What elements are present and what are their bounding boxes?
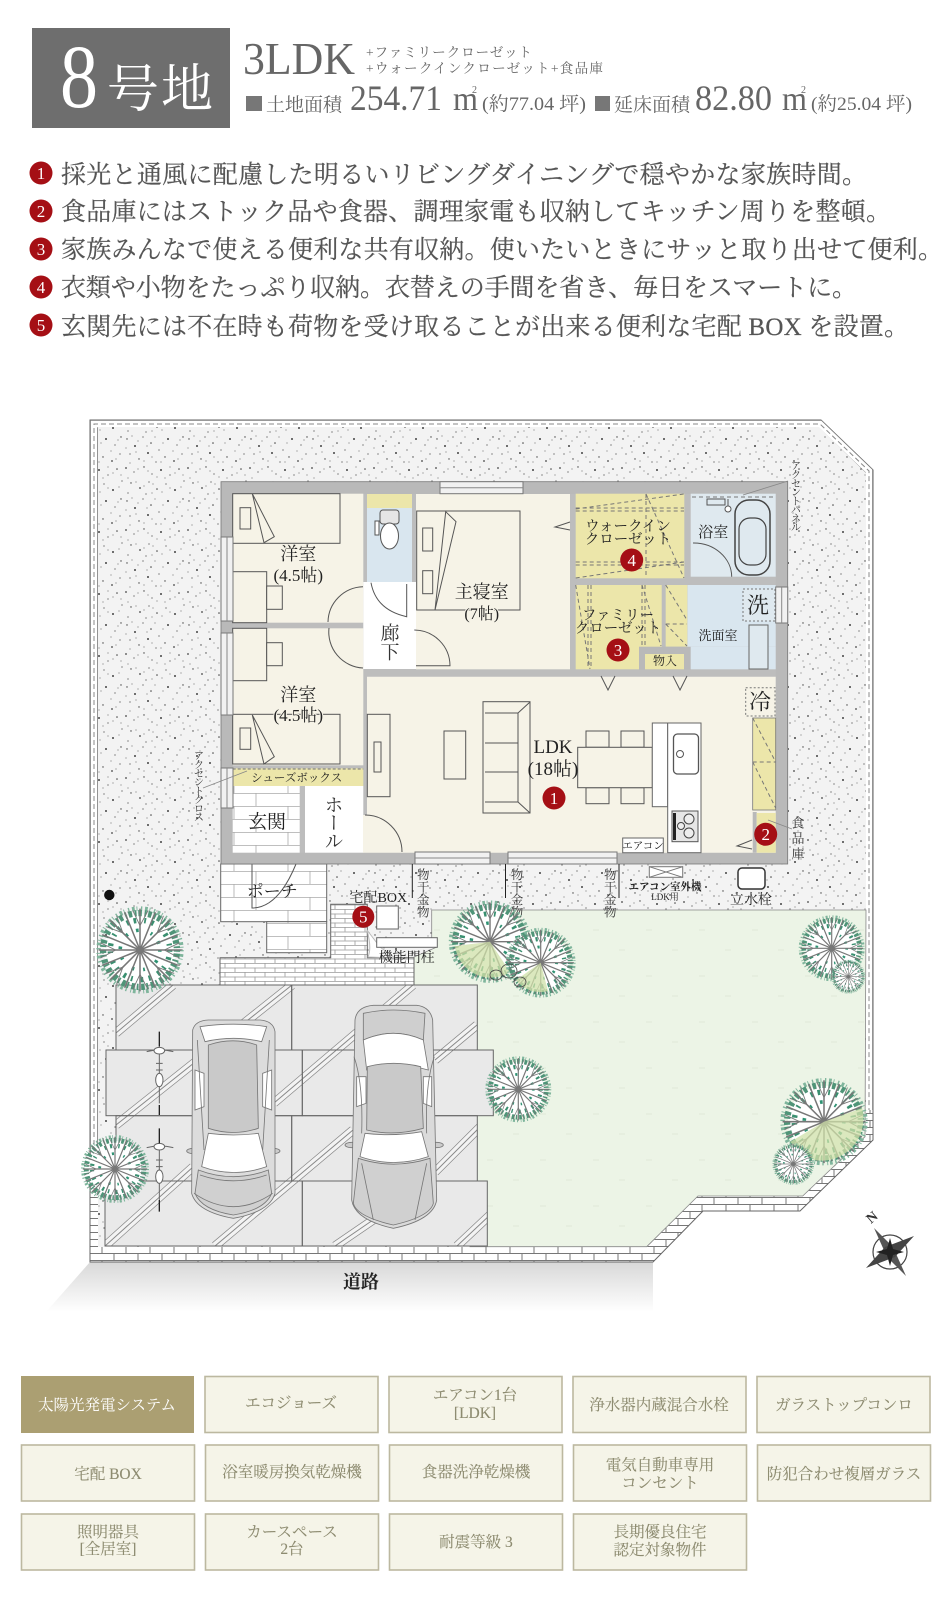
car right: [345, 1005, 443, 1228]
family closet: ファミリー: [582, 608, 654, 624]
feature 2: 食品庫にはストック品や食器、調理家電も収納してキッチン周りを整頓。: [61, 198, 891, 226]
item: long life housing: [574, 1514, 746, 1570]
feature 4: 衣類や小物をたっぷり収納。衣替えの手間を省き、毎日をスマートに。: [61, 274, 857, 302]
sofa: [483, 702, 530, 813]
fridge: 冷: [749, 690, 771, 714]
delivery box: [350, 889, 407, 929]
storage: [639, 647, 691, 670]
pantry: [737, 812, 777, 853]
shoe box: シューズボックス: [251, 772, 342, 784]
item: lighting: [全居室]: [80, 1540, 136, 1558]
plan type: 3LDK: [243, 33, 355, 84]
room: master bedroom: (7帖): [464, 605, 499, 623]
dining set: [578, 731, 652, 804]
trees: [83, 903, 865, 1201]
outdoor AC unit: エアコン室外機: [629, 880, 702, 893]
room: LDK: 1: [550, 789, 558, 808]
areas: 土地面積: [266, 94, 344, 116]
pantry: 2: [761, 825, 770, 844]
hall: ホール: [322, 795, 342, 850]
entrance: [233, 786, 300, 853]
item: security glass: 防犯合わせ複層ガラス: [767, 1464, 921, 1483]
areas: 2: [801, 85, 806, 96]
kitchen: [652, 723, 701, 853]
item: delivery box: 宅配 BOX: [74, 1465, 142, 1483]
room: bedroom lower: [233, 628, 363, 765]
item: lighting: 照明器具: [77, 1523, 140, 1541]
gravel ground: [98, 427, 866, 1247]
item: AC: [389, 1376, 562, 1432]
areas: (約25.04 坪): [811, 93, 912, 115]
outdoor marker dot: [104, 890, 115, 900]
lot number plate: [32, 28, 230, 128]
drying hardware labels: 物干金物: [509, 867, 523, 918]
family closet: [575, 585, 662, 669]
item: car space: [206, 1514, 378, 1570]
room: LDK: [363, 677, 777, 853]
compass: N: [864, 1209, 881, 1227]
hall: [305, 786, 363, 853]
pantry label: [768, 816, 804, 860]
storage: 物入: [653, 653, 677, 668]
house: [192, 460, 804, 864]
item: faucet: [573, 1376, 746, 1432]
item: glass cooktop: [757, 1376, 930, 1432]
item: long life housing: 長期優良住宅: [613, 1523, 707, 1541]
plan type: +ファミリークローゼット: [366, 45, 532, 60]
areas: m: [453, 81, 478, 118]
accent panel label: アクセントパネル: [790, 460, 801, 532]
item: solar: [21, 1376, 194, 1433]
boundary wall: [90, 420, 873, 1262]
entrance porch: ポーチ: [247, 882, 298, 901]
item: AC: エアコン1台: [433, 1386, 518, 1404]
cupboards: [753, 718, 776, 810]
room: bedroom upper: [233, 494, 363, 623]
shoe box: [233, 768, 363, 786]
room: toilet: [367, 494, 412, 582]
item: seismic: [390, 1514, 562, 1570]
walk-in closet: 4: [627, 551, 636, 570]
item: security glass: [758, 1445, 930, 1501]
header: [32, 28, 912, 128]
boundary fence strip: [94, 424, 869, 1193]
feature 3: 家族みんなで使える便利な共有収納。使いたいときにサッと取り出せて便利。: [61, 236, 943, 264]
family closet: 3: [614, 641, 622, 660]
parking area: [105, 985, 493, 1246]
entrance porch: [221, 864, 327, 953]
fridge: [746, 688, 775, 716]
item: bath dryer: [206, 1445, 378, 1501]
areas: m: [782, 81, 807, 118]
room: LDK: (18帖): [528, 758, 578, 780]
walk-in closet: クローゼット: [585, 532, 671, 548]
drying hardware labels: 物干金物: [602, 867, 617, 918]
item: dishwasher: [390, 1445, 562, 1501]
areas: 2: [472, 85, 477, 96]
room: washroom: 洗: [747, 593, 769, 618]
room: bedroom upper: 洋室: [280, 544, 316, 564]
areas: 82.80: [695, 78, 772, 118]
accent panel label: [743, 460, 801, 532]
drying hardware labels: [412, 864, 619, 918]
room: LDK: LDK: [533, 737, 573, 758]
side closet: [666, 585, 687, 647]
car left: [187, 1020, 280, 1218]
item: EV outlet: [574, 1445, 746, 1501]
areas: [246, 78, 912, 118]
outdoor faucet: 立水栓: [730, 891, 772, 908]
windows: [221, 482, 788, 864]
room: bedroom lower: (4.5帖): [274, 706, 323, 725]
function gate post: 機能門柱: [379, 949, 435, 966]
equipment grid: [21, 1376, 930, 1570]
room: washroom: 洗面室: [698, 628, 738, 643]
function gate post: [367, 930, 437, 966]
road: 道路: [343, 1272, 379, 1292]
item: eco jaws: エコジョーズ: [245, 1394, 337, 1412]
drying hardware labels: 物干金物: [415, 867, 430, 918]
corridor: 廊下: [378, 623, 399, 661]
room: washroom: [688, 585, 776, 669]
delivery box: 5: [359, 908, 368, 926]
compass: [864, 1209, 914, 1276]
accent cloth label: [192, 750, 247, 822]
feature list: [30, 161, 943, 341]
item: EV outlet: コンセント: [621, 1475, 699, 1492]
item: dishwasher: 食器洗浄乾燥機: [422, 1463, 531, 1481]
brick approach: [220, 904, 414, 985]
feature 3: 3: [37, 240, 45, 259]
item: bath dryer: 浴室暖房換気乾燥機: [222, 1463, 362, 1481]
walk-in closet: ウォークイン: [585, 519, 671, 535]
outdoor AC unit: LDK用: [651, 892, 679, 902]
living table: [444, 731, 466, 779]
walk-in closet: [576, 494, 684, 578]
areas: (約77.04 坪): [482, 93, 586, 115]
feature 1: 1: [37, 164, 45, 183]
corridor: [363, 582, 416, 669]
house walls: [221, 482, 788, 864]
feature 2: 2: [37, 202, 45, 221]
accent cloth label: アクセントクロス: [192, 750, 204, 822]
site plan: [46, 420, 914, 1312]
item: long life housing: 認定対象物件: [613, 1541, 707, 1559]
garden lawn: [414, 910, 866, 1247]
road: [46, 1262, 653, 1312]
family closet: クローゼット: [575, 621, 661, 637]
delivery box: 宅配BOX: [350, 889, 407, 906]
bicycles: [147, 1032, 173, 1212]
item: delivery box: [22, 1445, 194, 1501]
item: car space: カースペース: [246, 1524, 338, 1541]
areas: 254.71: [350, 78, 442, 118]
feature 1: 採光と通風に配慮した明るいリビングダイニングで穏やかな家族時間。: [61, 161, 867, 189]
item: eco jaws: [205, 1376, 378, 1432]
item: AC: [LDK]: [454, 1405, 496, 1422]
TV stand: [367, 714, 390, 797]
item: seismic: 耐震等級 3: [439, 1533, 513, 1551]
areas: 延床面積: [614, 94, 692, 116]
interior door marks: [601, 676, 687, 690]
outdoor AC unit: [629, 867, 702, 902]
item: car space: 2台: [280, 1540, 304, 1558]
air conditioner label: エアコン: [622, 841, 664, 852]
feature 5: 玄関先には不在時も荷物を受け取ることが出来る便利な宅配 BOX を設置。: [61, 313, 909, 341]
plan type: [243, 33, 603, 84]
item: glass cooktop: ガラストップコンロ: [775, 1396, 913, 1414]
item: EV outlet: 電気自動車専用: [606, 1456, 714, 1474]
outdoor faucet: [730, 868, 772, 908]
room: bathroom: [691, 494, 776, 577]
lot number plate: 号地: [107, 62, 213, 119]
pantry label: 食品庫: [790, 816, 804, 860]
item: solar: 太陽光発電システム: [38, 1396, 176, 1414]
item: faucet: 浄水器内蔵混合水栓: [589, 1396, 729, 1414]
room: master bedroom: 主寝室: [455, 582, 509, 602]
plan type: +ウォークインクローゼット+食品庫: [366, 61, 603, 76]
room: bedroom upper: (4.5帖): [274, 566, 323, 585]
room: master bedroom: [414, 494, 570, 669]
room: bedroom lower: 洋室: [280, 685, 316, 705]
item: lighting: [22, 1514, 194, 1570]
feature 5: 5: [37, 316, 45, 335]
feature 4: 4: [37, 278, 46, 297]
room: bathroom: 浴室: [698, 523, 728, 541]
entrance: 玄関: [248, 811, 286, 833]
lot number plate: 8: [60, 28, 98, 127]
